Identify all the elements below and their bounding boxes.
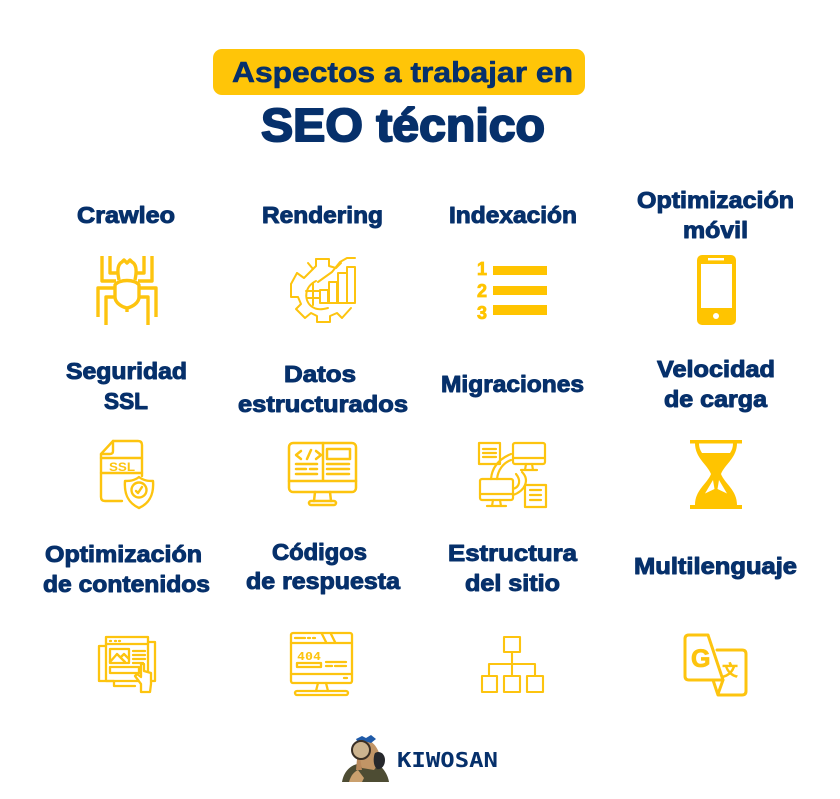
heading: móvil bbox=[683, 217, 748, 243]
icon: migrating computers and documents bbox=[479, 443, 546, 507]
icon: monitor with 404 error: 404 bbox=[297, 650, 321, 663]
panel: Migraciones bbox=[441, 371, 584, 507]
panel: Multilenguaje bbox=[634, 553, 797, 695]
heading: de carga bbox=[664, 386, 767, 412]
icon: translation cards: G bbox=[691, 645, 710, 673]
heading: SSL bbox=[104, 388, 148, 414]
panel: Seguridad SSL bbox=[66, 358, 187, 508]
panel: Optimización de contenidos bbox=[43, 541, 210, 692]
heading: Crawleo bbox=[77, 202, 175, 228]
heading bbox=[238, 361, 408, 417]
panel: Velocidad de carga bbox=[657, 356, 775, 509]
panel: Crawleo bbox=[77, 202, 175, 325]
heading: Optimización bbox=[637, 187, 794, 213]
icon: numbered list: 3 bbox=[477, 303, 487, 323]
heading: Rendering bbox=[262, 202, 383, 228]
icon: SSL file with shield bbox=[101, 441, 153, 508]
heading bbox=[66, 358, 187, 414]
icon: numbered list: 2 bbox=[477, 281, 487, 301]
wordmark: KIWOSAN bbox=[397, 748, 498, 772]
icon: translation cards: 文 bbox=[722, 661, 738, 680]
icon: spider bbox=[98, 256, 156, 325]
icon: hourglass bbox=[690, 440, 742, 509]
heading: estructurados bbox=[238, 391, 408, 417]
icon: numbered list bbox=[477, 259, 547, 323]
heading: Optimización bbox=[45, 541, 202, 567]
panel: Optimización móvil bbox=[637, 187, 794, 325]
panel: Indexación bbox=[449, 202, 577, 323]
logo bbox=[342, 735, 498, 782]
mascot bbox=[342, 735, 389, 782]
heading bbox=[246, 539, 400, 594]
title badge bbox=[213, 49, 585, 95]
heading: Datos bbox=[284, 361, 356, 387]
heading: Migraciones bbox=[441, 371, 584, 397]
heading: Indexación bbox=[449, 202, 577, 228]
heading bbox=[448, 540, 577, 596]
icon: smartphone bbox=[697, 255, 736, 325]
heading: Velocidad bbox=[657, 356, 775, 382]
title bbox=[213, 49, 585, 151]
heading: de respuesta bbox=[246, 568, 400, 594]
heading bbox=[637, 187, 794, 243]
heading bbox=[657, 356, 775, 412]
panel: Estructura del sitio bbox=[448, 540, 577, 692]
heading: de contenidos bbox=[43, 571, 210, 597]
panel: Datos estructurados bbox=[238, 361, 408, 505]
heading: Códigos bbox=[272, 539, 367, 565]
icon: numbered list: 1 bbox=[477, 259, 487, 279]
heading: Estructura bbox=[448, 540, 577, 566]
heading: del sitio bbox=[465, 570, 560, 596]
title line 1: Aspectos a trabajar en bbox=[232, 57, 573, 89]
icon: site hierarchy tree bbox=[482, 637, 543, 692]
title line 2: SEO técnico bbox=[261, 99, 545, 151]
icon: gear with bar chart bbox=[291, 258, 355, 322]
heading bbox=[43, 541, 210, 597]
heading: Multilenguaje bbox=[634, 553, 797, 579]
icon: web content with pointing hand bbox=[99, 637, 155, 692]
icon: SSL file with shield: SSL bbox=[109, 460, 135, 474]
panel: Rendering bbox=[262, 202, 383, 322]
icon: monitor with 404 error bbox=[291, 633, 352, 695]
panel: Códigos de respuesta bbox=[246, 539, 400, 695]
heading: Seguridad bbox=[66, 358, 187, 384]
icon: monitor with code bbox=[289, 443, 356, 505]
icon: translation cards bbox=[685, 635, 746, 695]
